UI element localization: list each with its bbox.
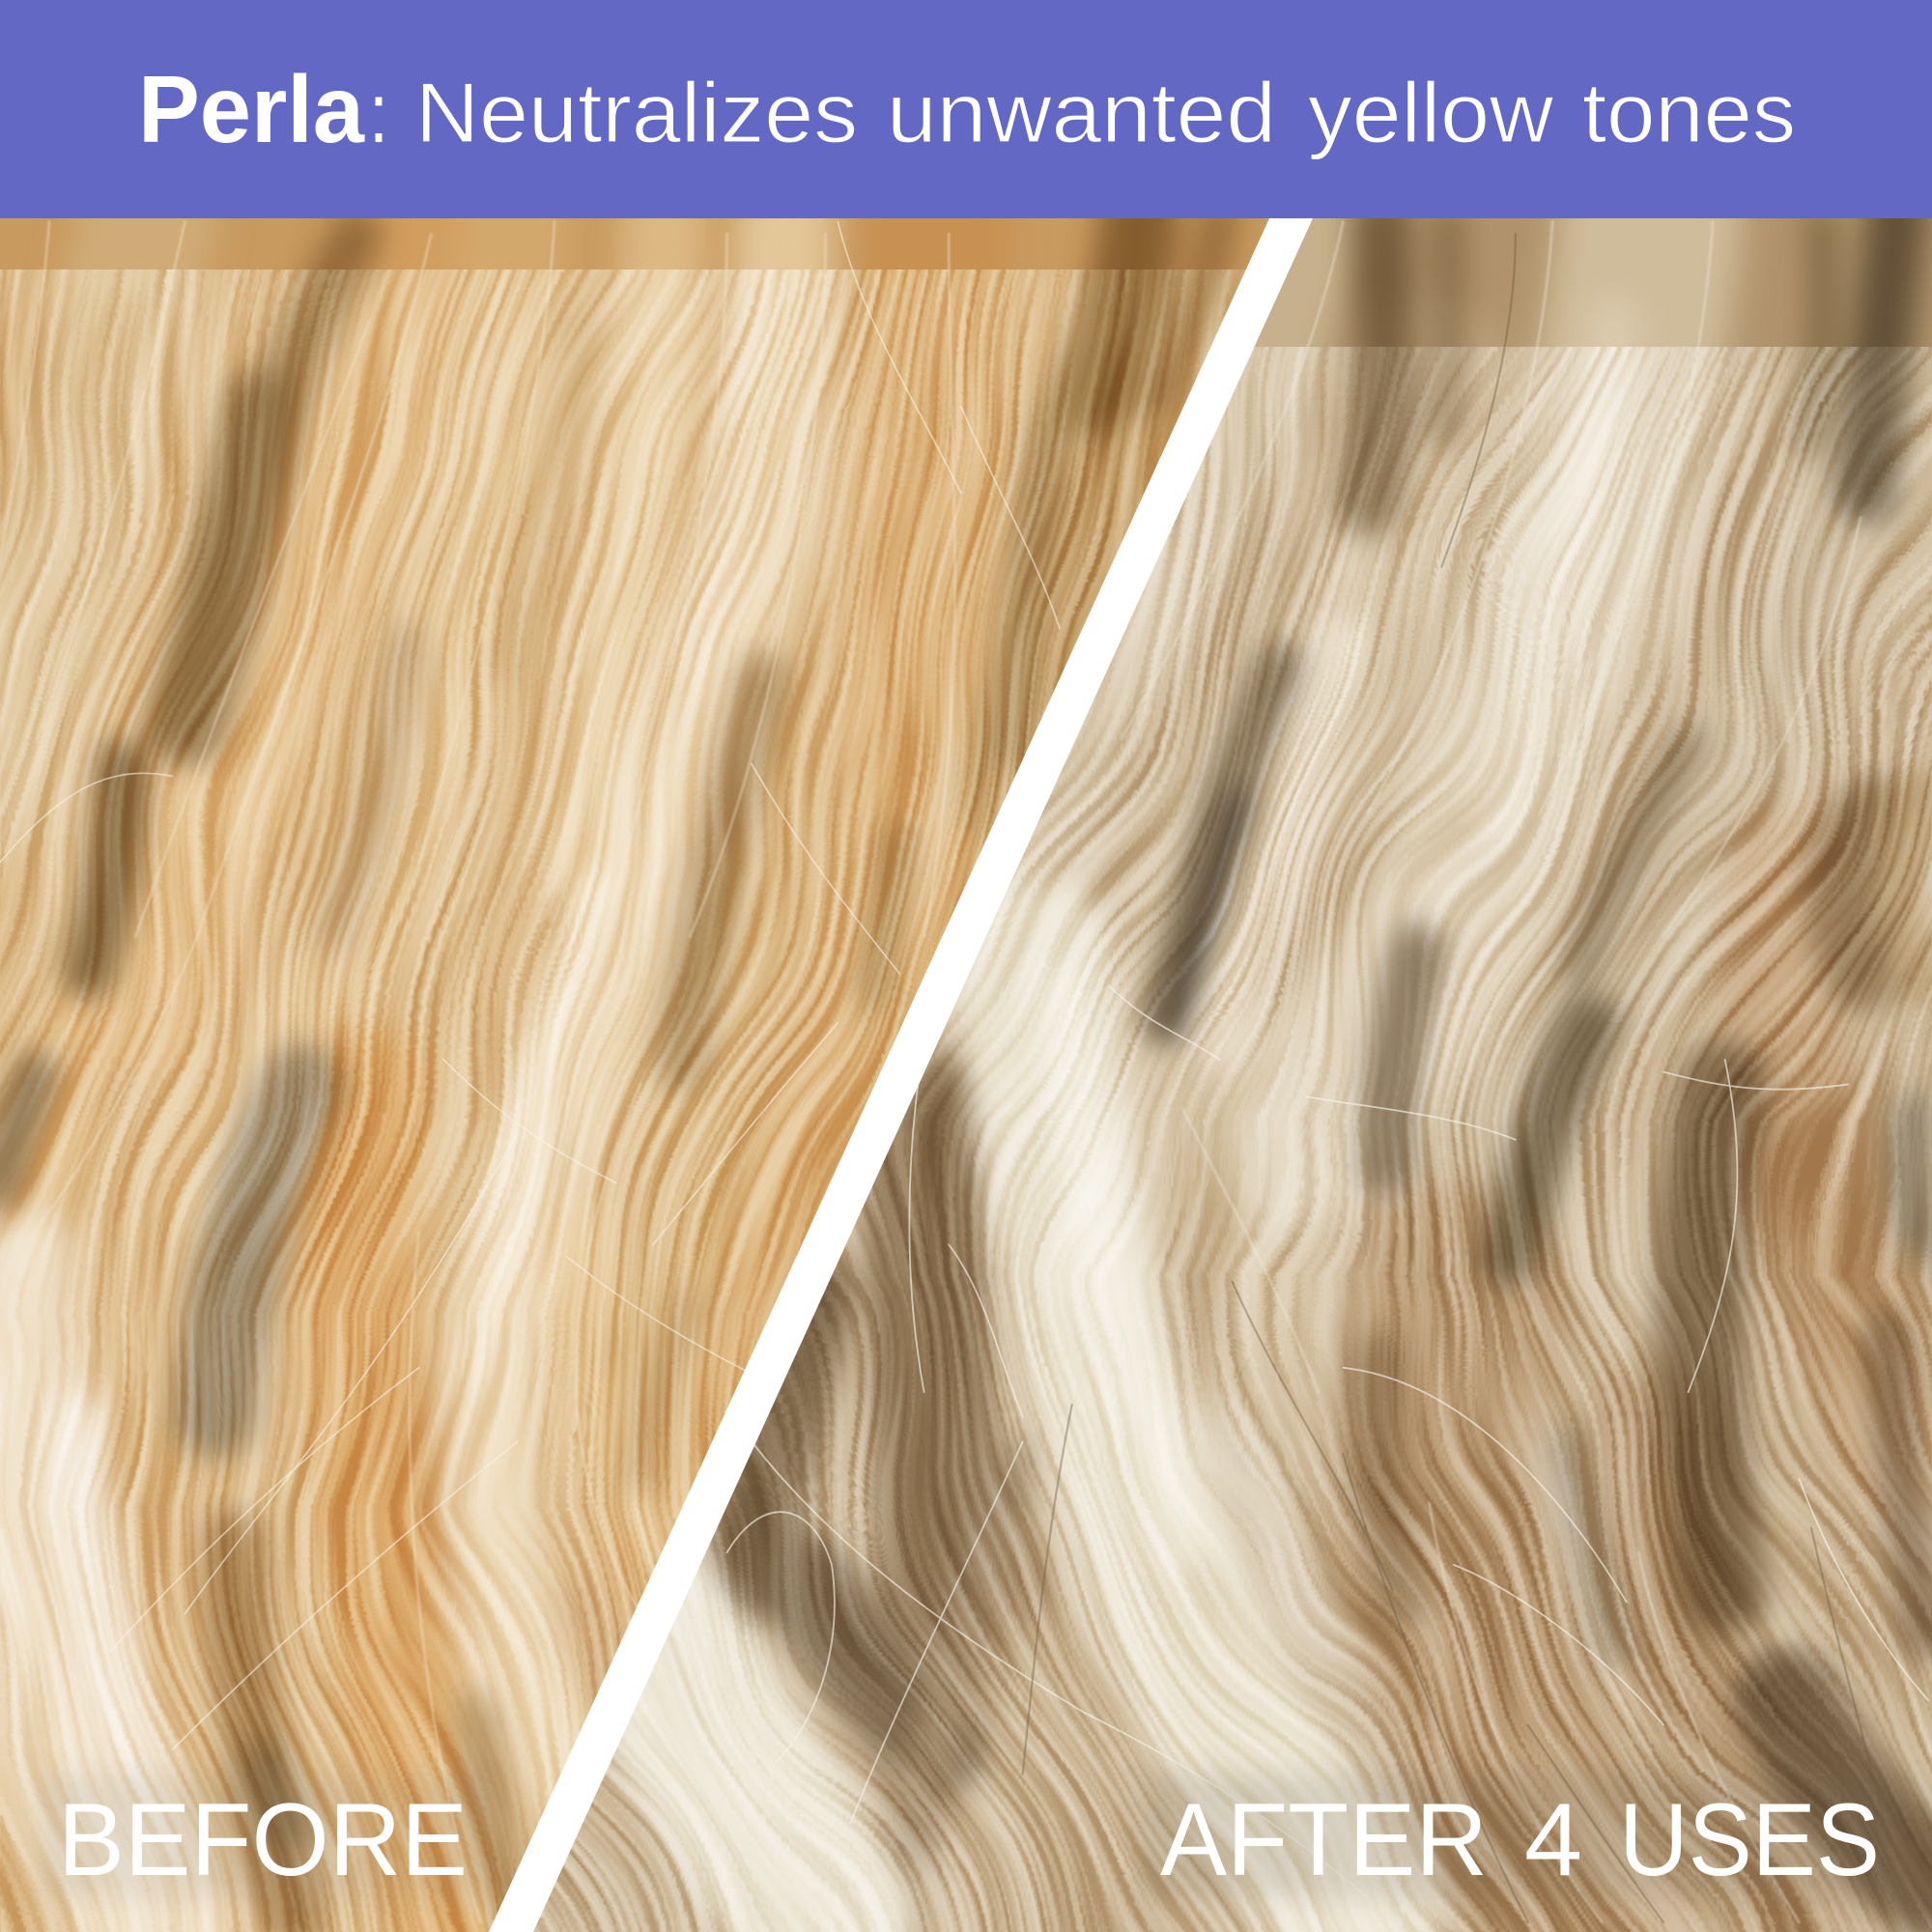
title: unwanted	[887, 65, 1276, 160]
label: after 4 uses: USES	[1619, 1781, 1880, 1897]
big cream strands	[629, 961, 1355, 1922]
photo: after hair panel	[533, 218, 1932, 1932]
label backdrop: soft shade behind before text	[39, 1773, 493, 1898]
diagonal white divider	[489, 218, 1313, 1932]
label: before: BEFORE	[58, 1781, 468, 1897]
title	[138, 56, 1796, 162]
title: Neutralizes	[415, 65, 858, 160]
photo: before hair panel	[0, 218, 1269, 1932]
label backdrop: soft shade behind after text	[1140, 1773, 1903, 1898]
title: tones	[1582, 65, 1796, 160]
title: yellow	[1308, 65, 1553, 160]
header banner	[0, 0, 1932, 218]
label: after 4 uses	[1160, 1781, 1880, 1897]
label: after 4 uses: 4	[1524, 1781, 1582, 1897]
title: Perla	[138, 56, 365, 162]
label: after 4 uses: AFTER	[1160, 1781, 1488, 1897]
title: :	[369, 65, 388, 160]
